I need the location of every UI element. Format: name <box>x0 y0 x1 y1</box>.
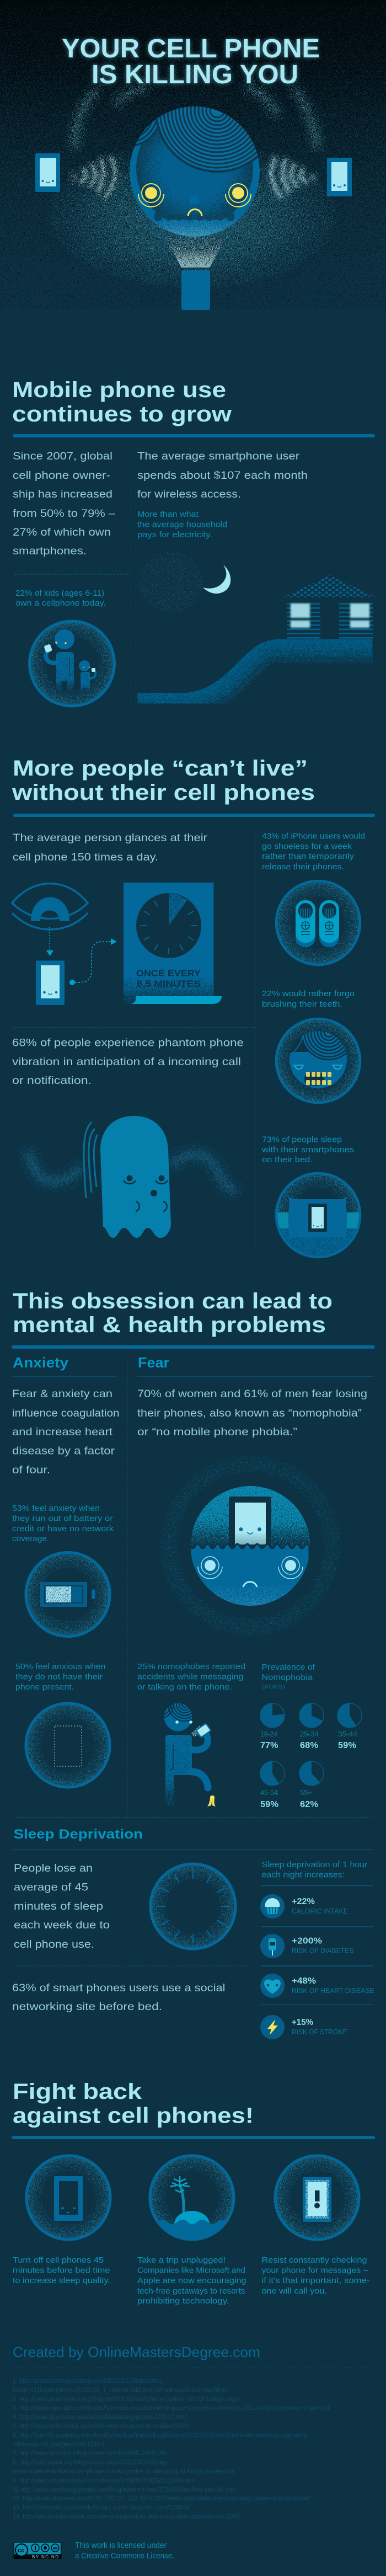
grainy trail behind ghost <box>29 1150 237 1191</box>
pie 35-44 <box>337 1703 362 1750</box>
pie 25-34: 25-34 <box>300 1730 319 1738</box>
note: electricity: pays for electricity. <box>137 531 212 539</box>
heading: fight back: against cell phones! <box>13 2104 254 2128</box>
note: accidents <box>137 1663 245 1692</box>
icon: glucose meter <box>260 1934 285 1958</box>
section rule <box>13 434 375 437</box>
tip: trip unplugged: Companies like Microsoft and <box>137 2266 245 2275</box>
pie charts: prevalence of nomophobia <box>260 1663 362 1809</box>
teeth row <box>154 212 234 221</box>
stat: heart disease: +48% <box>292 1976 316 1986</box>
pie 45-54: 45-54 <box>260 1788 278 1797</box>
source list: 5. http://www.techcentral.co.za/the-next-10-years-in-mobile/27522/ <box>13 2423 191 2430</box>
icon: palm island <box>149 2155 235 2245</box>
note: sleep deprivation increases <box>261 1861 368 1880</box>
icon: eye <box>12 884 88 929</box>
note: sleep with phones: on their bed. <box>262 1155 313 1164</box>
tip: trip unplugged: Take a trip unplugged! <box>137 2256 226 2265</box>
subheading: anxiety: Anxiety <box>13 1354 69 1371</box>
night sky stipple <box>139 552 203 612</box>
text: fear <box>137 1388 367 1438</box>
note: shoeless: release their phones. <box>262 862 344 872</box>
text: lost sleep <box>14 1862 110 1950</box>
eyes <box>198 1557 303 1579</box>
note: accidents: accidents while messaging <box>137 1672 244 1681</box>
pie 55+: 55+ <box>300 1788 312 1797</box>
note: anxious without phone: they do not have their <box>15 1672 103 1681</box>
vibration lines <box>84 1122 98 1198</box>
note: battery anxiety: they run out of battery or <box>12 1515 113 1524</box>
tip: trip unplugged: tech-free getaways to resorts <box>137 2286 245 2296</box>
icon: lightning bolt <box>260 2015 285 2039</box>
text: glances: The average person glances at their <box>13 832 208 844</box>
text: lost sleep: cell phone use. <box>14 1938 94 1950</box>
tip: resist checking: if it’s that important, some- <box>261 2276 369 2285</box>
icon: phantom ghost <box>84 1116 171 1238</box>
stat: stroke: +15% <box>292 2018 313 2027</box>
right leg <box>192 1772 208 1788</box>
note: anxious without phone <box>15 1663 106 1692</box>
source list: 8. http://scientopia.org/blogs/scicurious/2011/05/27/friday- <box>13 2460 168 2466</box>
pie 45-54: 59% <box>260 1800 278 1809</box>
text: glances <box>13 832 208 863</box>
head <box>130 106 260 237</box>
icon: dirty teeth face <box>275 1017 362 1104</box>
heading: can't live: without their cell phones <box>12 781 315 805</box>
stat: caloric intake <box>260 1894 348 1918</box>
note: electricity <box>137 510 227 539</box>
section rule <box>12 1345 375 1349</box>
text: phantom vibration: vibration in anticipation of a incoming call <box>12 1056 241 1068</box>
arrow: phone to clock <box>69 938 117 985</box>
pie 35-44: 35-44 <box>338 1730 357 1738</box>
text: anxiety <box>12 1388 119 1476</box>
heading: mental and health problems: mental & health problems <box>13 1313 326 1337</box>
text: fear: their phones, also known as “nomophobia” <box>137 1407 362 1419</box>
arm <box>192 1734 208 1750</box>
heading: mobile phone use <box>12 378 232 426</box>
text: fear: or “no mobile phone phobia.” <box>137 1426 297 1438</box>
text: lost sleep: minutes of sleep <box>14 1900 103 1912</box>
pie 18-24: 18-24 <box>260 1730 277 1738</box>
source list: 9. http://www.sciencedaily.com/releases/2008/03/080325111800.htm <box>13 2477 195 2484</box>
source list: 2. http://www.pewinternet.org/Reports/2012/Smartphone-Update-2012/Findings.aspx <box>13 2396 239 2403</box>
icon: missing phone <box>24 1702 111 1788</box>
credit line: Created by OnlineMastersDegree.com <box>13 2344 260 2360</box>
tip: resist checking: one will call you. <box>261 2286 327 2296</box>
heading: fight back: Fight back <box>13 2080 142 2104</box>
note: accidents: or talking on the phone. <box>137 1683 232 1692</box>
source list: 11.http://www.psychologytoday.com/blog/extreme-fear/201004/yes-fear-can-kill-you <box>13 2487 235 2493</box>
note: anxious without phone: 50% feel anxious when <box>15 1663 106 1671</box>
note: sleep with phones: 73% of people sleep <box>262 1135 342 1144</box>
tip: trip unplugged <box>137 2256 246 2306</box>
text: social networking: networking site before bed. <box>12 2001 162 2013</box>
note: shoeless: go shoeless for a week <box>262 842 352 851</box>
note: shoeless: 43% of iPhone users would <box>262 832 365 841</box>
note: teeth: 22% would rather forgo <box>262 989 355 998</box>
tip: turn off phones: Turn off cell phones 45 <box>13 2256 104 2265</box>
text: social networking <box>12 1982 225 2013</box>
heading: fight back <box>13 2080 254 2128</box>
pie 55+: 62% <box>300 1800 318 1809</box>
license text: This work is licensed under <box>75 2541 167 2550</box>
source list: 3. http://www.experian.com/assets/simmons-research/white-papers/experian-simmons-2011-mobile-consumer-report.pdf <box>13 2405 331 2412</box>
note: kids: own a cellphone today. <box>15 599 106 608</box>
note: teeth: brushing their teeth. <box>262 1000 342 1009</box>
hill <box>137 639 373 693</box>
text: anxiety: and increase heart <box>12 1426 113 1438</box>
text: phantom vibration: or notification. <box>12 1075 92 1087</box>
tip: trip unplugged: prohibiting technology. <box>137 2296 229 2306</box>
source list: 4. http://news.discovery.com/tech/afraid-losing-phone-120217.html <box>13 2414 187 2421</box>
icon: muffin <box>260 1894 285 1918</box>
hero illustration <box>35 76 352 310</box>
note: shoeless <box>262 832 365 872</box>
text: ownership growth: ship has increased <box>13 488 112 500</box>
title <box>62 34 320 89</box>
note: kids: 22% of kids (ages 6-11) <box>15 589 104 598</box>
icon: left phone <box>35 153 60 192</box>
text: ownership growth: Since 2007, global <box>13 450 112 462</box>
icon: battery <box>24 1551 111 1638</box>
text: wireless spending <box>137 450 308 500</box>
text: lost sleep: People lose an <box>14 1862 93 1874</box>
icon: person slipping on banana <box>164 1703 216 1807</box>
text: ownership growth: 27% of which own <box>13 526 111 538</box>
icon: phone on pillow <box>275 1172 361 1259</box>
sound waves right <box>271 156 314 199</box>
text: phantom vibration: 68% of people experience phantom phone <box>12 1037 244 1049</box>
text: wireless spending: spends about $107 each month <box>137 469 308 482</box>
torso and left leg <box>165 1735 192 1806</box>
note: electricity: More than what <box>137 510 199 519</box>
text: ownership growth: smartphones. <box>13 545 87 557</box>
heading: mental and health problems: This obsession can lead to <box>13 1289 333 1313</box>
source list: 6. http://yourlife.usatoday.com/health/medical/mentalhealth/story/2011/07/Smartphone-dependency-a-growing <box>13 2432 307 2439</box>
text: phantom vibration <box>12 1037 244 1087</box>
chart title: Prevalence of <box>261 1663 315 1672</box>
text: wireless spending: The average smartphone user <box>137 450 300 462</box>
pie 45-54 <box>260 1761 285 1809</box>
icon: phone <box>36 961 65 1005</box>
neck beam <box>165 237 227 268</box>
clock face <box>136 893 201 958</box>
tip: turn off phones: to increase sleep quality. <box>13 2276 110 2285</box>
heading: mobile phone use: continues to grow <box>12 402 232 426</box>
note: kids <box>15 589 106 608</box>
icon: clock dial <box>149 1862 237 1950</box>
icon: crescent moon <box>203 565 230 594</box>
stat: caloric intake: +22% <box>292 1897 315 1906</box>
source list: 7. http://www.ncbi.nlm.nih.gov/pmc/articles/PMC2940196/ <box>13 2450 167 2457</box>
stat: diabetes: RISK OF DIABETES <box>292 1947 354 1955</box>
icon: phone turned off <box>25 2155 111 2241</box>
text: anxiety: disease by a factor <box>12 1445 115 1457</box>
creative commons badge: BY NC ND <box>32 2554 58 2559</box>
icon: frightened face with drowning phone <box>169 1464 332 1627</box>
grainy halo behind head <box>47 88 339 290</box>
note: battery anxiety <box>12 1504 114 1543</box>
text: anxiety: of four. <box>12 1464 50 1476</box>
note: anxious without phone: phone present. <box>15 1683 74 1692</box>
tip: trip unplugged: Apple are now encouraging <box>137 2276 246 2285</box>
text: fear: 70% of women and 61% of men fear losing <box>137 1388 367 1400</box>
hair right <box>156 106 258 173</box>
icon: adult and child on phones <box>29 620 116 707</box>
subheading: sleep deprivation: Sleep Deprivation <box>13 1827 143 1842</box>
source list: 14. http://www.healthiertalk.com/sleep-deprivation-delivers-double-diabetes-risk-2095 <box>13 2514 240 2520</box>
caption: once every 6.5 minutes <box>136 968 201 989</box>
source list: -obsession-to-gadgets/49661286/1 <box>13 2441 105 2448</box>
icon: shoes <box>275 880 361 966</box>
tip: resist checking: your phone for messages – <box>261 2266 368 2275</box>
stat: caloric intake: CALORIC INTAKE <box>292 1907 348 1915</box>
sound waves left <box>72 156 115 199</box>
stat: diabetes: +200% <box>292 1936 322 1946</box>
note: electricity: the average household <box>137 521 227 530</box>
stat: diabetes <box>260 1934 354 1958</box>
caption: once every 6.5 minutes: ONCE EVERY <box>136 968 201 979</box>
note: accidents: 25% nomophobes reported <box>137 1663 245 1671</box>
icon: right phone <box>327 158 352 196</box>
pie 25-34: 68% <box>300 1741 318 1750</box>
stat: stroke <box>260 2015 347 2039</box>
source list: 12. http://www.cbsnews.com/8301-505125_162-48440287/sleep-deprivation-the-surprising-causes-and-solutions/ <box>13 2495 310 2502</box>
source list <box>12 2378 331 2520</box>
icon: house <box>283 575 377 639</box>
heading: can't live: More people “can’t live” <box>13 756 308 781</box>
handset <box>181 270 210 310</box>
chart title: (AGES) <box>261 1684 285 1690</box>
license text <box>75 2541 174 2561</box>
source list: health-0118-cell-phone-20120118_1_internet-addiction-iphone-users-slot-machines <box>13 2387 228 2393</box>
chart title: Nomophobia <box>261 1674 313 1682</box>
text: ownership growth: cell phone owner- <box>13 469 110 482</box>
tip: turn off phones <box>13 2256 110 2285</box>
note: sleep deprivation increases: each night increases: <box>261 1871 345 1880</box>
text: anxiety: Fear & anxiety can <box>12 1388 112 1400</box>
source list: 1. http://articles.chicagotribune.com/2012-01-18/health/sc- <box>13 2378 164 2385</box>
text: lost sleep: average of 45 <box>14 1881 88 1893</box>
note: sleep with phones: with their smartphones <box>261 1145 354 1155</box>
note: sleep with phones <box>261 1135 354 1164</box>
heading: can't live <box>12 756 315 805</box>
text: ownership growth: from 50% to 79% – <box>13 507 115 520</box>
note: battery anxiety: credit or have no network <box>12 1525 114 1533</box>
text: ownership growth <box>13 450 115 557</box>
text: anxiety: influence coagulation <box>12 1407 119 1419</box>
pie 35-44: 59% <box>338 1741 356 1750</box>
subheading: fear: Fear <box>138 1354 169 1371</box>
title: IS KILLING YOU <box>92 60 298 89</box>
heading: mobile phone use: Mobile phone use <box>12 378 226 402</box>
arrow: eye to phone <box>46 927 53 956</box>
pie 18-24 <box>260 1703 285 1750</box>
text: glances: cell phone 150 times a day. <box>13 851 158 863</box>
source list: 13. http://chronicle.com/article/Bleary-Eyed-Students-Cant/129838/ <box>13 2505 191 2511</box>
text: lost sleep: each week due to <box>14 1919 110 1931</box>
title: YOUR CELL PHONE <box>62 34 320 63</box>
section rule <box>13 814 375 817</box>
pie 25-34 <box>299 1703 324 1750</box>
creative commons badge <box>13 2542 62 2559</box>
hair left <box>135 115 162 147</box>
note: shoeless: rather than temporarily <box>262 852 355 861</box>
text: wireless spending: for wireless access. <box>137 488 241 500</box>
nose <box>190 195 199 204</box>
book with clock <box>124 883 222 1004</box>
text: social networking: 63% of smart phones users use a social <box>12 1982 225 1994</box>
creative commons badge: cc <box>18 2547 24 2554</box>
section rule <box>12 2136 375 2139</box>
chart title <box>261 1663 315 1690</box>
icon: phone exclamation <box>274 2155 361 2241</box>
stat: heart disease <box>260 1974 374 1998</box>
pie 18-24: 77% <box>260 1741 278 1750</box>
caption: once every 6.5 minutes: 6.5 MINUTES <box>137 979 201 989</box>
note: battery anxiety: coverage. <box>12 1535 49 1543</box>
heading: mental and health problems <box>13 1289 333 1337</box>
note: battery anxiety: 53% feel anxiety when <box>12 1504 100 1513</box>
icon: banana <box>207 1795 216 1807</box>
stat: heart disease: RISK OF HEART DISEASE <box>292 1987 374 1995</box>
stat: stroke: RISK OF STROKE <box>292 2028 347 2036</box>
source list: weird-science-is-that-a-cell-phone-in-your-pocket-or-are-you-just-happy-to-see-me/ <box>12 2468 235 2475</box>
tip: turn off phones: minutes before bed time <box>13 2266 110 2275</box>
note: sleep deprivation increases: Sleep deprivation of 1 hour <box>261 1861 368 1869</box>
icon: sick heart <box>260 1974 285 1998</box>
note: teeth <box>262 989 355 1009</box>
tip: resist checking: Resist constantly checking <box>261 2256 367 2265</box>
eyes and mouth <box>138 184 251 216</box>
license text: a Creative Commons License. <box>75 2552 174 2561</box>
tip: resist checking <box>261 2256 369 2296</box>
pie 55+ <box>299 1761 324 1809</box>
